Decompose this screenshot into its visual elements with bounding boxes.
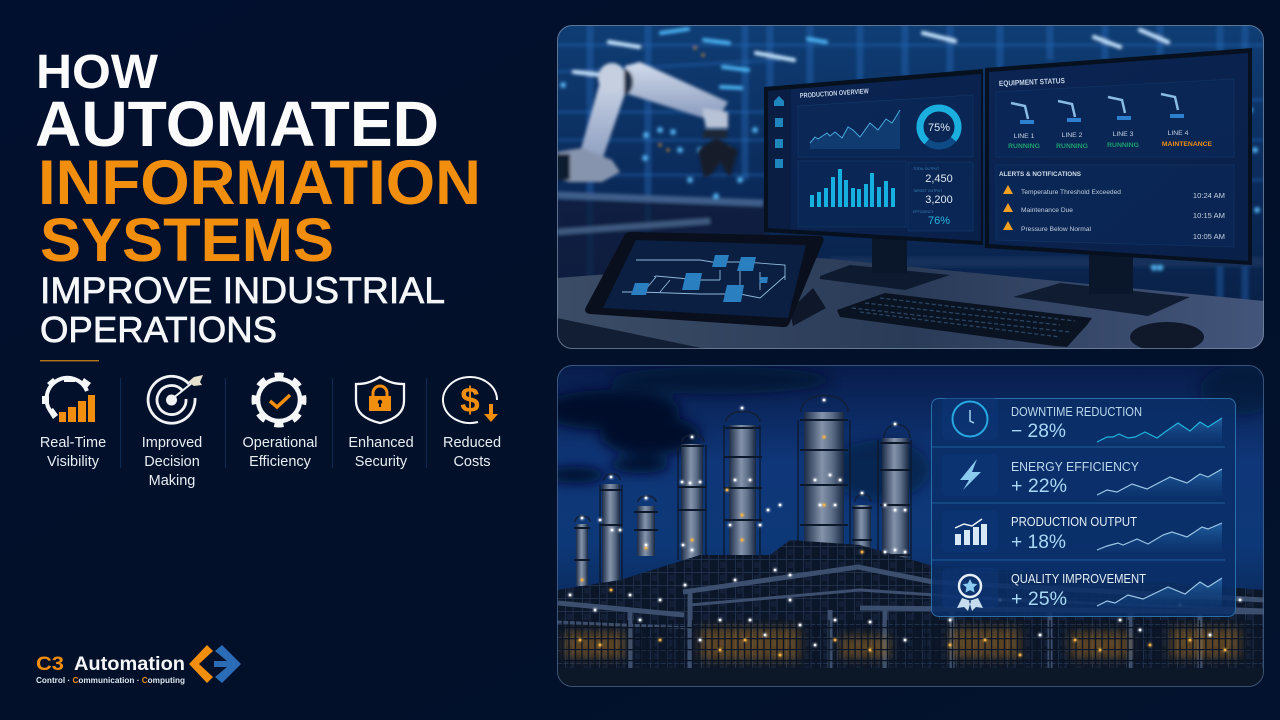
stats: 3,200 — [925, 194, 953, 206]
line status labels: RUNNING — [1008, 143, 1040, 150]
row: energy efficiency: ENERGY EFFICIENCY — [1011, 460, 1140, 474]
robot arm — [557, 62, 738, 182]
panel: control room — [557, 25, 1264, 352]
row: production output: PRODUCTION OUTPUT — [1011, 515, 1137, 529]
line status labels: MAINTENANCE — [1162, 141, 1213, 148]
donut chart 75% — [916, 104, 962, 150]
alerts and notifications: 10:05 AM — [1193, 232, 1225, 241]
alerts and notifications: ALERTS & NOTIFICATIONS — [999, 171, 1081, 178]
logo: C3 Automation: C3 — [36, 654, 64, 675]
stats — [913, 167, 953, 227]
tablet — [585, 232, 826, 327]
alerts and notifications: Pressure Below Normal — [1021, 226, 1091, 233]
metrics overlay — [932, 398, 1236, 616]
factory background — [557, 26, 1263, 300]
logo: C3 Automation — [36, 645, 241, 685]
monitor: production overview — [764, 69, 983, 245]
text: benefit labels: Visibility — [47, 454, 100, 470]
line status labels: LINE 3 — [1113, 131, 1134, 138]
alerts and notifications: Temperature Threshold Exceeded — [1021, 189, 1121, 196]
robots — [1011, 94, 1184, 122]
row: downtime reduction — [952, 402, 1222, 444]
panel: refinery at night — [540, 365, 1280, 687]
title: OPERATIONS — [40, 309, 277, 350]
desk — [557, 258, 1264, 349]
row: production output: + 18% — [1011, 532, 1066, 553]
row: energy efficiency: + 22% — [1011, 476, 1067, 497]
stats: 2,450 — [925, 173, 953, 185]
heading: production overview: PRODUCTION OVERVIEW — [800, 88, 869, 100]
monitor: equipment status — [985, 48, 1252, 265]
alerts and notifications: 10:15 AM — [1193, 211, 1225, 220]
warm lights — [557, 400, 1264, 668]
icon: reduced costs: $ — [460, 381, 480, 420]
stats: TARGET OUTPUT — [913, 189, 943, 193]
row: downtime reduction: DOWNTIME REDUCTION — [1011, 405, 1142, 419]
text: benefit labels: Efficiency — [249, 454, 312, 470]
line status labels: RUNNING — [1056, 143, 1088, 150]
icon: real-time visibility — [42, 377, 95, 422]
bar chart — [810, 169, 895, 207]
text: benefit labels — [40, 435, 501, 489]
text: benefit labels: Improved — [142, 435, 202, 451]
row: energy efficiency — [960, 459, 1222, 497]
sidebar icons — [774, 96, 784, 168]
title: SYSTEMS — [40, 206, 334, 274]
stats: EFFICIENCY — [913, 210, 934, 214]
clouds — [540, 365, 1280, 500]
stats: TOTAL OUTPUT — [913, 167, 940, 171]
benefits row — [40, 375, 501, 489]
text: benefit labels: Making — [149, 473, 195, 489]
line status labels: LINE 2 — [1062, 132, 1083, 139]
mouse — [1130, 322, 1204, 349]
text: benefit labels: Operational — [243, 435, 317, 451]
line status labels: LINE 1 — [1014, 133, 1035, 140]
row: quality improvement — [957, 572, 1222, 611]
title: IMPROVE INDUSTRIAL — [40, 270, 445, 311]
title — [35, 46, 481, 350]
text: benefit labels: Costs — [453, 454, 491, 470]
row: quality improvement: QUALITY IMPROVEMENT — [1011, 572, 1146, 586]
keyboard — [837, 293, 1092, 347]
alerts and notifications — [999, 171, 1225, 241]
icon: efficiency gear — [254, 376, 304, 424]
text: benefit labels: Enhanced — [348, 435, 414, 451]
text: benefit labels: Security — [355, 454, 408, 470]
row: production output — [954, 517, 1222, 550]
text: benefit labels: Decision — [144, 454, 200, 470]
icon: reduced costs — [443, 377, 498, 423]
line chart — [810, 110, 900, 149]
row: downtime reduction: − 28% — [1011, 421, 1066, 442]
icon: target — [148, 375, 203, 423]
line status labels: RUNNING — [1107, 142, 1139, 149]
row: quality improvement: + 25% — [1011, 589, 1067, 610]
title: INFORMATION — [38, 148, 481, 218]
title: HOW — [36, 46, 159, 99]
text: benefit labels: Real-Time — [40, 435, 106, 451]
stats: 76% — [928, 215, 950, 227]
donut chart 75%: 75% — [928, 122, 950, 134]
alerts and notifications: 10:24 AM — [1193, 191, 1225, 200]
line status labels — [1008, 130, 1212, 148]
alerts and notifications: Maintenance Due — [1021, 207, 1073, 214]
monitor stands — [820, 235, 1190, 316]
distillation towers — [574, 396, 911, 594]
text: benefit labels: Reduced — [443, 435, 501, 451]
logo: C3 Automation: Control · Communication · Computing — [36, 675, 185, 685]
pipe racks — [557, 540, 1264, 670]
logo: C3 Automation: Automation — [74, 654, 185, 675]
icon: shield — [356, 377, 404, 423]
heading: equipment status: EQUIPMENT STATUS — [999, 76, 1065, 88]
line status labels: LINE 4 — [1168, 130, 1189, 137]
title: AUTOMATED — [35, 88, 439, 160]
